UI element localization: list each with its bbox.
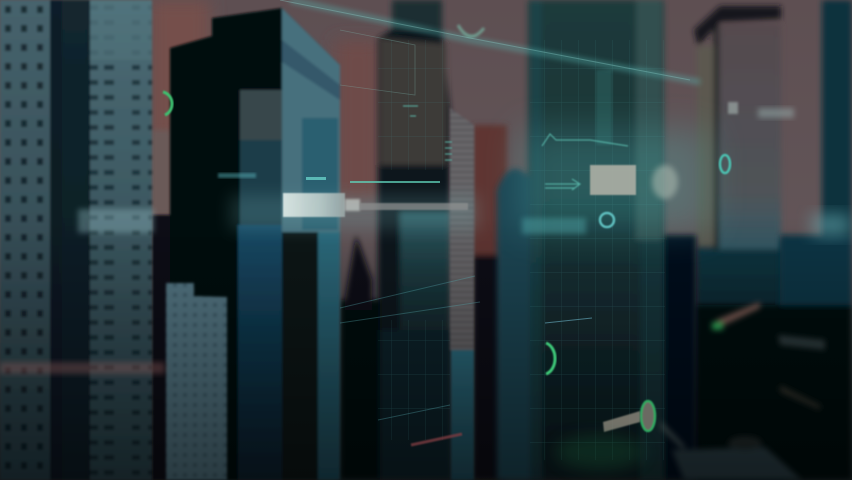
mid tower with light side face [340, 0, 452, 480]
holographic grid panel [340, 40, 665, 460]
light side face of mid tower [450, 108, 474, 480]
data panel glow at right centre [520, 70, 850, 236]
background building: red tower [473, 125, 507, 480]
streak accents [0, 362, 645, 470]
icon: green and teal ring gauges [163, 92, 730, 431]
central dark tower with grid [497, 0, 696, 480]
bottom right street area [660, 302, 825, 480]
far right dark tower [696, 0, 852, 480]
glowing teal diagonal beam [280, 0, 700, 95]
front small tower [166, 283, 227, 480]
glowing horizontal band [78, 173, 480, 233]
left foreground towers with window grids [0, 0, 152, 480]
dark tower with blue face [152, 8, 340, 480]
chart line and arrow overlay [403, 106, 628, 190]
right tower with dark frame [694, 6, 786, 480]
